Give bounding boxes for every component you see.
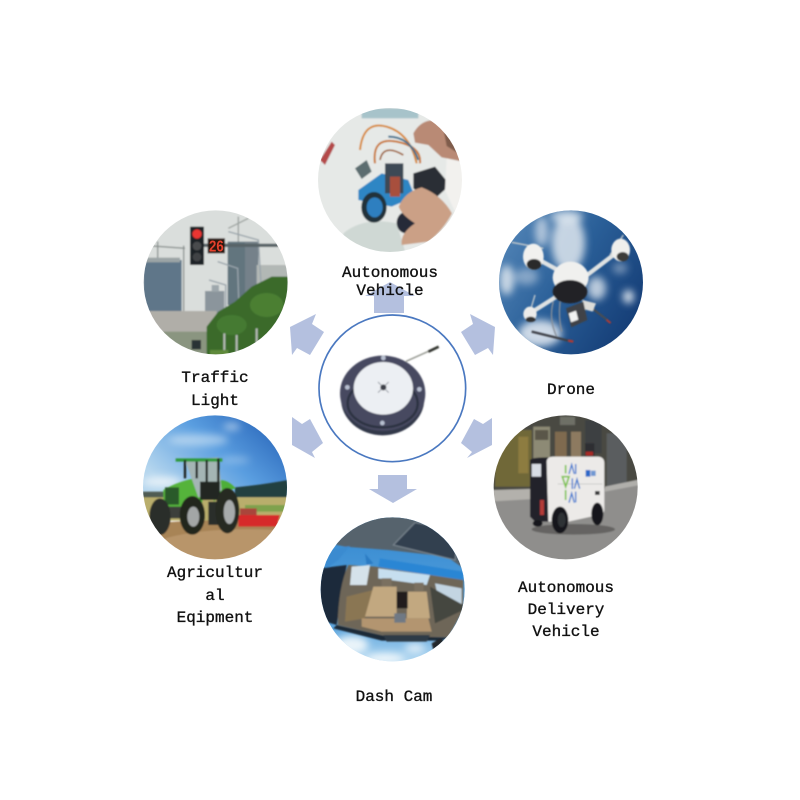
label: autonomous vehicle: Autonomous [342,264,438,282]
label: autonomous delivery vehicle: Autonomous [518,579,614,597]
panel: drone [497,208,647,399]
arrow: to delivery vehicle [461,418,492,458]
arrow: to agricultural equipment [292,417,323,458]
label: autonomous delivery vehicle: Vehicle [532,623,600,641]
label: agricultural equipment: Agricultur [167,564,263,582]
panel: autonomous vehicle [318,108,462,296]
photo: hands building a robot car [318,108,462,252]
centre ring [319,315,466,462]
photo: rearview mirror showing car interior [318,515,468,665]
signal countdown number: 26 [209,238,224,255]
label: traffic light: Light [191,392,239,410]
photo: quadcopter in cloudy sky [497,208,647,357]
panel: centre antenna module [319,315,466,462]
label: traffic light: Traffic [181,369,249,387]
panel: dash cam [318,515,468,706]
icon: round antenna device [340,347,439,435]
panel: autonomous delivery vehicle [492,413,642,641]
arrow: down to dash cam [369,475,417,503]
label: autonomous vehicle: Vehicle [356,282,424,300]
photo: green tractor in field [142,413,292,563]
label: autonomous delivery vehicle: Delivery [528,601,605,619]
label: drone: Drone [547,381,595,399]
arrow: to traffic light [290,314,324,355]
label: dash cam: Dash Cam [356,688,432,706]
infographic diagram [143,108,643,702]
label: agricultural equipment: Eqipment [177,609,253,627]
photo: traffic signal and city [142,208,292,357]
arrow: up to autonomous vehicle [365,282,415,313]
arrow: to drone [461,314,495,355]
panel: traffic light [142,208,292,410]
photo: white delivery robot on street [492,413,642,562]
label: agricultural equipment: al [205,587,225,605]
panel: agricultural equipment [142,413,292,627]
